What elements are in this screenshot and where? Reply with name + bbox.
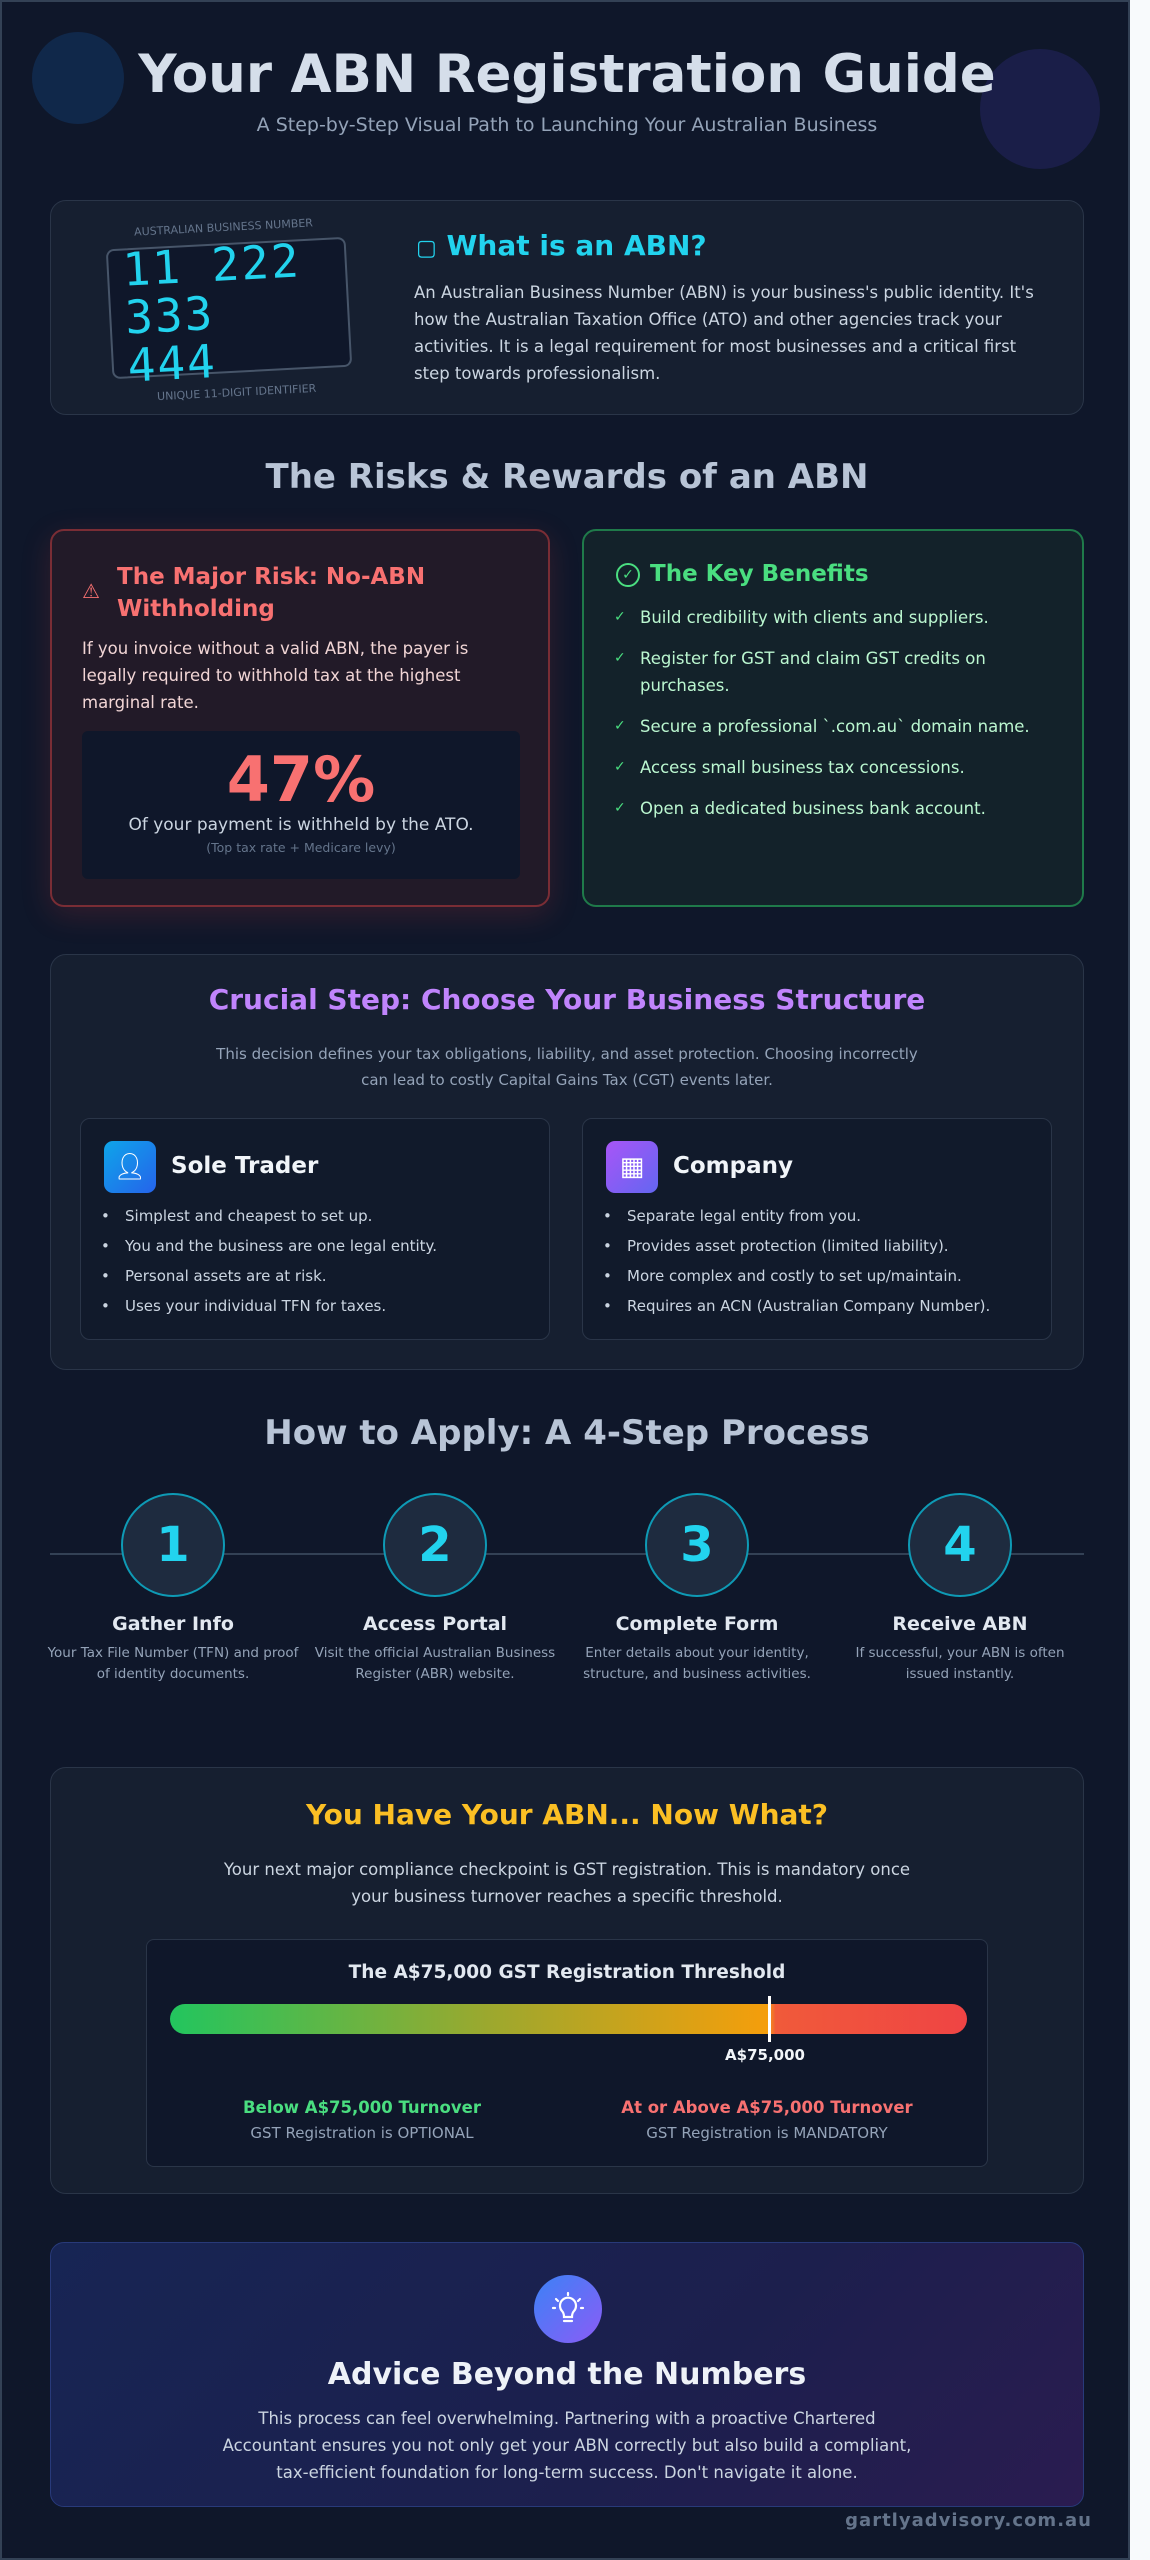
heading: advice: Advice Beyond the Numbers [328,2357,806,2392]
chart: GST threshold: The A$75,000 GST Registration Threshold [349,1962,785,1983]
card: sole trader: Simplest and cheapest to set up. [125,1207,372,1225]
chart: GST threshold: Below A$75,000 Turnover [243,2098,481,2117]
text: risk explanation: If you invoice without a valid ABN, the payer is legally required to withhold tax at the highest marginal rate. [82,639,468,712]
icon: building [606,1141,658,1193]
step 3 [583,1493,811,1682]
step 4: If successful, your ABN is often issued instantly. [855,1645,1064,1682]
chart: GST threshold: A$75,000 [725,2046,805,2064]
text: ABN definition: An Australian Business Number (ABN) is your business's public identity. It's how the Australian Taxation Office (ATO) and other agencies track your activities. It is a legal requirement for most businesses and a critical first step towards professionalism. [414,283,1034,383]
panel: what is an ABN [50,200,1084,415]
footer: website: gartlyadvisory.com.au [845,2510,1092,2531]
stat: 47%: (Top tax rate + Medicare levy) [206,840,396,855]
card: sole trader: You and the business are one legal entity. [125,1237,437,1255]
card: company: Provides asset protection (limited liability). [627,1237,949,1255]
list: benefits: ✓ [614,609,626,625]
heading: now what: You Have Your ABN... Now What? [306,1798,828,1831]
heading: what is an ABN: ▢ What is an ABN? [416,229,707,262]
heading: risks and rewards: The Risks & Rewards of an ABN [266,457,868,497]
heading: how to apply: How to Apply: A 4-Step Process [264,1413,870,1453]
panel: advice [50,2242,1084,2507]
list: benefits [614,608,1030,818]
step 4: 4 [943,1517,977,1573]
step 4 [855,1493,1064,1682]
icon: ABN card graphic: 333 [124,286,216,345]
icon: ABN card graphic [106,216,352,403]
text: advice body: This process can feel overwhelming. Partnering with a proactive Chartered Accountant ensures you not only get your ABN correctly but also build a compliant, tax-efficient foundation for long-term success. Don't navigate it alone. [223,2409,911,2482]
step 1 [48,1493,299,1682]
card: company: Requires an ACN (Australian Company Number). [627,1297,990,1315]
icon: ABN card graphic: UNIQUE 11-DIGIT IDENTIFIER [157,382,317,403]
list: benefits: Open a dedicated business bank account. [640,799,986,818]
step 1: 1 [156,1517,190,1573]
step 2 [314,1493,555,1682]
icon: building: ▦ [620,1152,644,1182]
list: benefits: Build credibility with clients and suppliers. [640,608,989,627]
list: benefits: ✓ [614,800,626,816]
panel: business structure [50,954,1084,1370]
heading: key benefits: The Key Benefits [650,561,869,587]
panel: major risk [50,529,550,907]
list: benefits: ✓ [614,650,626,666]
heading: key benefits: ✓ [622,567,634,583]
chart: GST threshold [146,1939,988,2167]
subtitle: A Step-by-Step Visual Path to Launching Your Australian Business [257,114,877,136]
title: Your ABN Registration Guide [138,44,996,105]
panel: now what / GST [50,1767,1084,2194]
card: sole trader: Sole Trader [171,1153,318,1179]
card: company: Separate legal entity from you. [627,1207,861,1225]
stat: 47%: Of your payment is withheld by the ATO. [128,815,474,835]
step 1: Gather Info [112,1613,234,1635]
card: company: Company [673,1153,793,1179]
heading: major risk: The Major Risk: No-ABN Withholding [117,564,425,622]
list: benefits: ✓ [614,759,626,775]
text: GST intro: Your next major compliance checkpoint is GST registration. This is mandatory once your business turnover reaches a specific threshold. [224,1860,910,1906]
heading: business structure: Crucial Step: Choose Your Business Structure [209,983,925,1016]
timeline line [50,1553,1084,1555]
stat: 47%: 47% [227,743,375,816]
icon: person [104,1141,156,1193]
step 4: Receive ABN [892,1613,1028,1635]
stat: 47% [82,731,520,879]
list: benefits: Register for GST and claim GST credits on purchases. [640,649,986,695]
card: sole trader: Personal assets are at risk. [125,1267,327,1285]
step 1: Your Tax File Number (TFN) and proof of identity documents. [48,1645,298,1682]
step 2: Access Portal [363,1613,507,1635]
icon: person: 👤︎ [113,1152,146,1182]
card: company [582,1118,1052,1340]
decorative circle right [980,49,1100,169]
card: company: More complex and costly to set up/maintain. [627,1267,962,1285]
text: structure intro: This decision defines your tax obligations, liability, and asset protection. Choosing incorrectly can lead to costly Capital Gains Tax (CGT) events later. [216,1045,918,1089]
list: benefits: Access small business tax concessions. [640,758,965,777]
icon: ABN card graphic: 11 222 [121,233,302,297]
icon: lightbulb [534,2275,602,2343]
list: benefits: Secure a professional `.com.au` domain name. [640,717,1030,736]
card: sole trader: Uses your individual TFN for taxes. [125,1297,386,1315]
step 2: 2 [418,1517,452,1573]
chart: GST threshold: GST Registration is OPTIONAL [250,2124,474,2142]
icon: ABN card graphic: 444 [126,334,218,393]
decorative circle left [32,32,124,124]
card: sole trader [80,1118,550,1340]
step 3: Enter details about your identity, structure, and business activities. [583,1645,811,1682]
panel: key benefits [582,529,1084,907]
heading: major risk: ⚠ [82,579,100,603]
icon: ABN card graphic: AUSTRALIAN BUSINESS NUMBER [134,216,313,239]
list: benefits: ✓ [614,718,626,734]
chart: GST threshold: GST Registration is MANDATORY [646,2124,888,2142]
chart: GST threshold: At or Above A$75,000 Turnover [621,2098,913,2117]
step 2: Visit the official Australian Business Register (ABR) website. [315,1645,555,1682]
step 3: Complete Form [616,1613,778,1635]
step 3: 3 [680,1517,714,1573]
